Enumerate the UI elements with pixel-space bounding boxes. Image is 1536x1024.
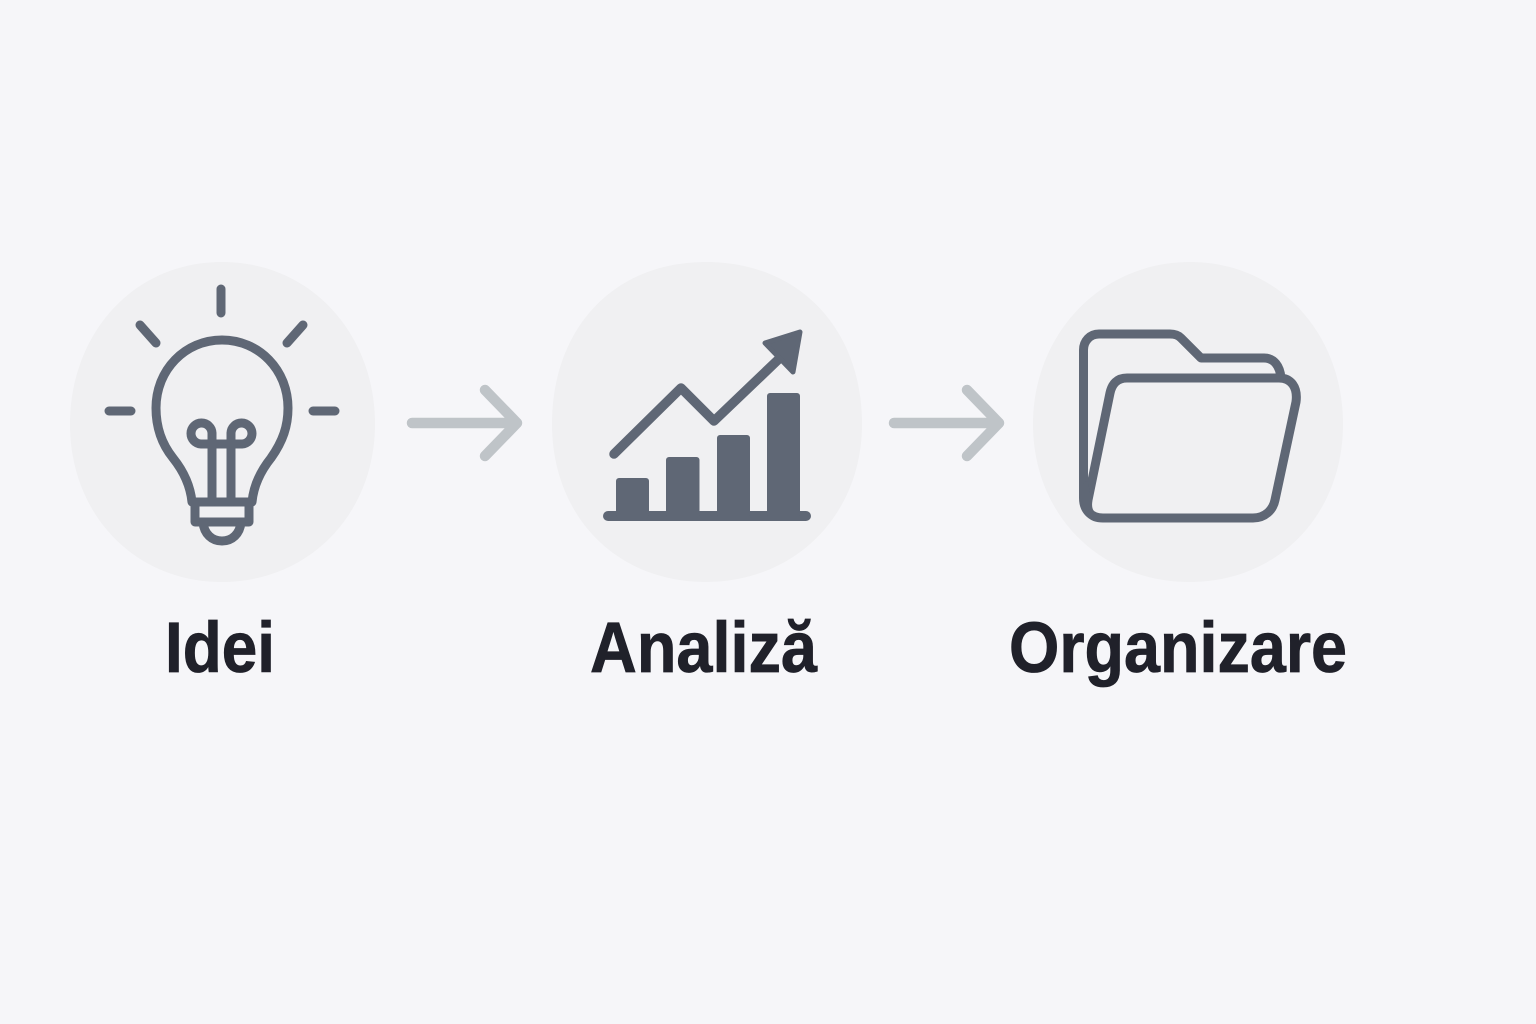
label: Idei: Idei xyxy=(165,609,275,688)
icon: growth bar chart xyxy=(603,332,811,521)
label: Organizare: Organizare xyxy=(1009,609,1347,688)
icon background: step 2 xyxy=(552,262,862,582)
step 3: Organizare xyxy=(1009,262,1347,688)
step 2: Analiză xyxy=(552,262,862,688)
step 1: Idei xyxy=(70,262,375,688)
arrow: step 2 to step 3 xyxy=(894,390,999,456)
arrow: step 1 to step 2 xyxy=(412,390,517,456)
icon: open folder xyxy=(1084,334,1296,518)
icon background: step 3 xyxy=(1033,262,1343,582)
icon: light bulb xyxy=(109,289,335,541)
label: Analiză: Analiză xyxy=(590,609,817,688)
icon background: step 1 xyxy=(70,262,375,582)
